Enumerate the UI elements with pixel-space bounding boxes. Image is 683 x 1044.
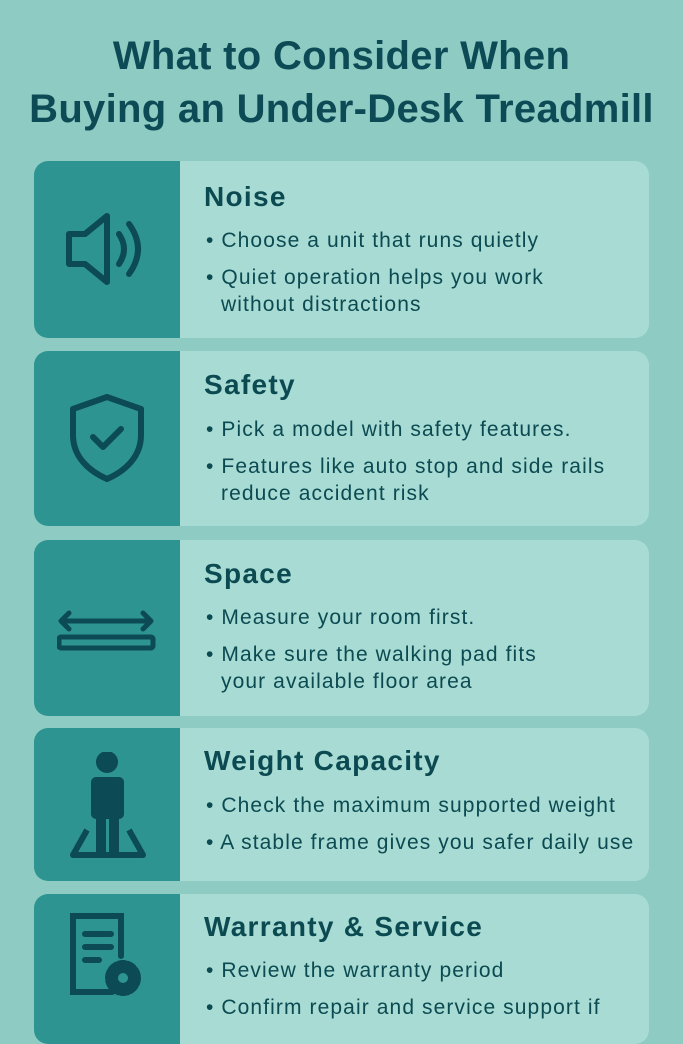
bullets: • A stable frame gives you safer daily use — [206, 831, 634, 854]
panel: weight — [34, 728, 649, 881]
bullets: • Features like auto stop and side rails — [206, 455, 605, 478]
icon: person on pad — [34, 728, 180, 881]
heading: Warranty & Service — [204, 911, 483, 942]
bullets — [206, 794, 634, 854]
bullets: without distractions — [221, 293, 422, 316]
title: What to Consider When — [113, 34, 570, 78]
bullets: • Review the warranty period — [206, 959, 504, 982]
panel: safety — [34, 351, 649, 526]
title: Buying an Under-Desk Treadmill — [29, 87, 654, 131]
panel: noise — [34, 161, 649, 338]
bullets — [206, 418, 605, 505]
panel: space — [34, 540, 649, 716]
heading: Weight Capacity — [204, 745, 441, 776]
bullets: • Choose a unit that runs quietly — [206, 229, 539, 252]
bullets: • Pick a model with safety features. — [206, 418, 572, 441]
bullets: • Quiet operation helps you work — [206, 266, 544, 289]
bullets: • Confirm repair and service support if — [206, 996, 601, 1019]
icon: speaker — [34, 161, 180, 338]
icon: document gear — [34, 894, 180, 1044]
heading: Space — [204, 558, 293, 589]
panel: warranty — [34, 894, 649, 1044]
heading: Noise — [204, 181, 287, 212]
icon: shield — [34, 351, 180, 526]
heading: Safety — [204, 369, 296, 400]
bullets: reduce accident risk — [221, 482, 430, 505]
bullets: your available floor area — [221, 670, 473, 693]
title — [29, 34, 654, 131]
icon: arrows — [34, 540, 180, 716]
bullets: • Make sure the walking pad fits — [206, 643, 537, 666]
bullets: • Check the maximum supported weight — [206, 794, 616, 817]
bullets: • Measure your room first. — [206, 606, 475, 629]
bullets — [206, 959, 601, 1019]
bullets — [206, 229, 544, 316]
bullets — [206, 606, 537, 693]
